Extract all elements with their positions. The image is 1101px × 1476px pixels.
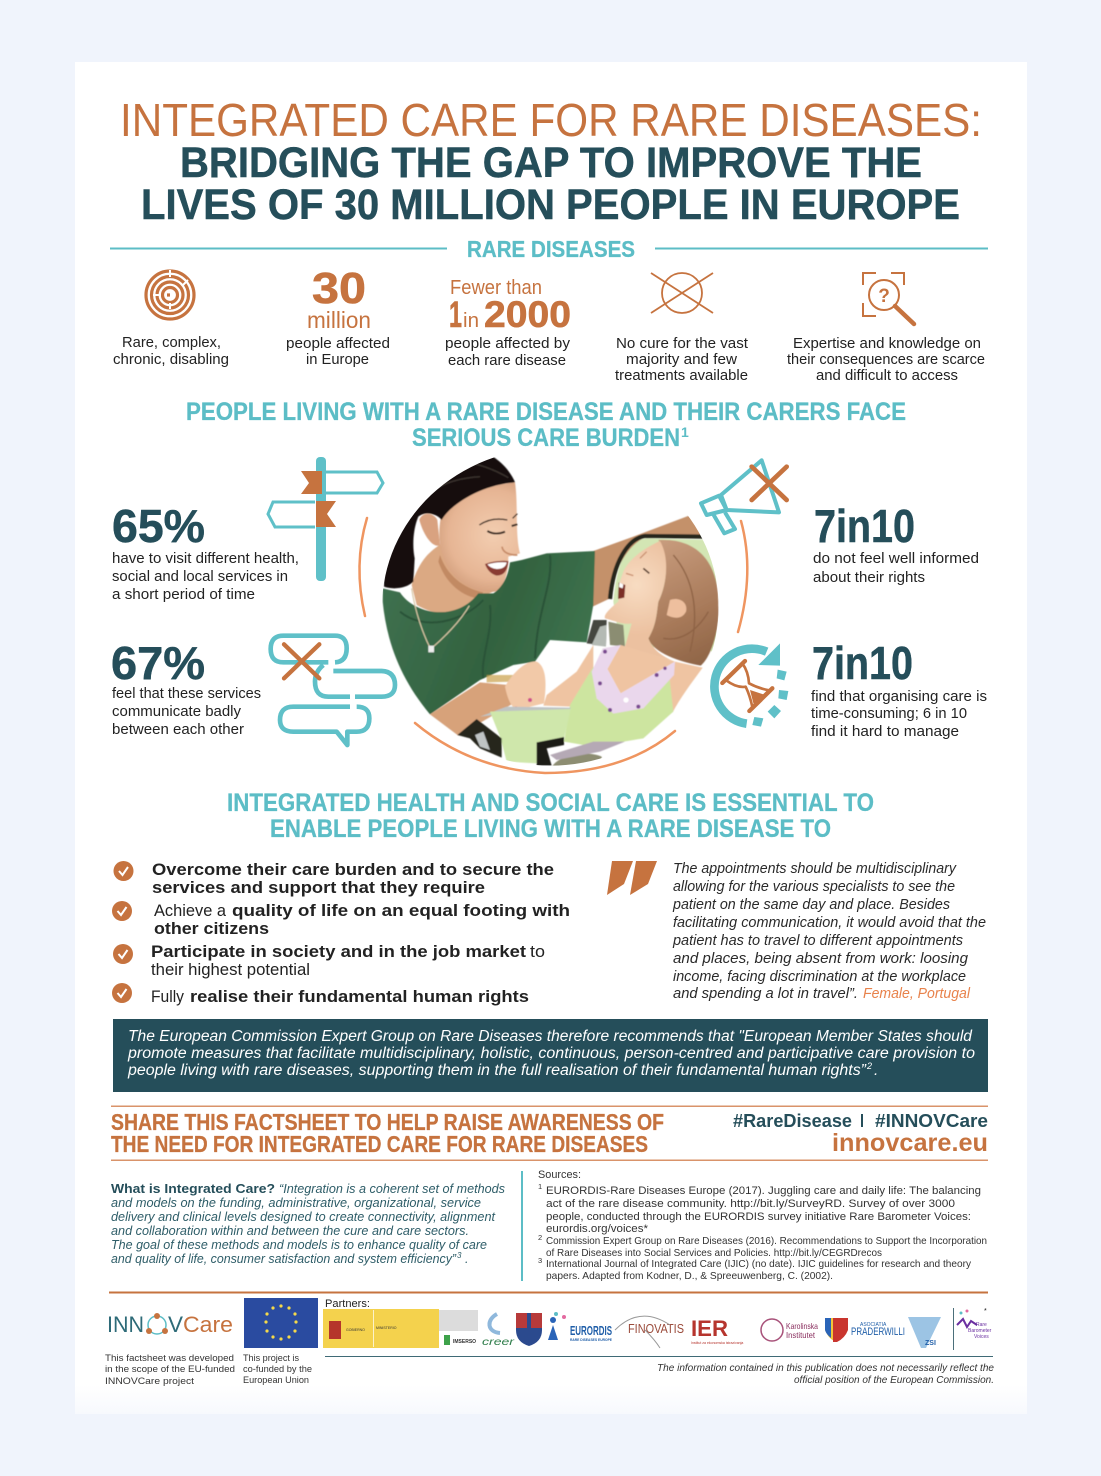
list: goals: realise their fundamental human rights [190,988,529,1006]
text: expertise: their consequences are scarce [787,351,985,368]
panel: recommendation: 2 [866,1061,872,1071]
quote: patient on the same day and place. Besides [672,897,950,913]
icon: labyrinth [146,270,194,319]
logo: ZSI [908,1317,941,1348]
text: sources: 3 [538,1256,542,1265]
stat: fewer than 1 in 2000: 2000 [484,294,571,335]
stat: 65%: social and local services in [112,568,288,585]
arc: orange ring segments [359,518,747,773]
logo: EURORDIS: EURORDIS [570,1323,612,1338]
logo: Spanish government: MINISTERIO [376,1326,397,1330]
text: what is integrated care: “Integration is a coherent set of methods [279,1182,505,1196]
title [120,94,982,229]
logo: Karolinska Institutet: Institutet [786,1330,816,1340]
stat: 7 in 10 time-consuming [811,637,987,740]
stat: fewer than 1 in 2000 [445,277,571,369]
logo: EURORDIS [548,1312,612,1342]
logo: Prader Willi: ASOCIATIA [860,1322,887,1328]
icon: speech bubbles crossed [271,636,395,745]
quote: income, facing discrimination at the workplace [673,969,966,985]
icon: check 2 [112,901,132,921]
logo: Rare Barometer Voices [953,1308,992,1350]
stat: fewer than 1 in 2000: people affected by [445,335,571,352]
call to action: share: SHARE THIS FACTSHEET TO HELP RAISE AWARENESS OF [111,1109,664,1135]
stat: 67% [111,637,261,738]
call to action: share: #INNOVCare [875,1111,988,1131]
icon: megaphone crossed [701,460,787,533]
text: disclaimer: official position of the European Commission. [794,1375,994,1386]
text: no cure [615,335,749,384]
quote: facilitating communication, it would avoid that the [673,915,986,931]
text: what is integrated care: delivery and clinical levels designed to create connectivity, alignment [111,1210,496,1224]
panel: recommendation [113,1019,988,1092]
heading: integrated care essential: INTEGRATED HEALTH AND SOCIAL CARE IS ESSENTIAL TO [227,789,874,817]
quote: patient has to travel to different appointments [672,933,963,949]
text: sources: EURORDIS-Rare Diseases Europe (2017). Juggling care and daily life: The balancing [546,1185,981,1197]
text: what is integrated care: The goal of these methods and models is to enhance quality of care [111,1238,487,1252]
text: expertise [787,335,985,384]
logo: FINOVATIS: FINOVATIS [628,1321,684,1336]
text: rare, complex [113,334,229,368]
heading: care burden [186,398,906,452]
list: goals: their highest potential [151,961,310,979]
divider [325,1356,993,1357]
logo: Prader Willi: PRADERWILLI [851,1326,905,1338]
logo: Rare Barometer Voices: Rare [976,1322,987,1328]
call to action: share: THE NEED FOR INTEGRATED CARE FOR RARE DISEASES [111,1131,648,1157]
stat: 7 in 10 time-consuming: find that organising care is [811,688,987,705]
icon: check 1 [114,861,134,881]
text: sources: papers. Adapted from Kodner, D., & Spreeuwenberg, C. (2002). [546,1270,833,1282]
woman shirt [383,551,595,714]
title: BRIDGING THE GAP TO IMPROVE THE [180,139,922,187]
list: goals: Participate in society and in the job market [151,943,527,961]
text: sources: eurordis.org/voices* [546,1223,649,1235]
logo: Rare Barometer Voices: Barometer [968,1328,992,1334]
list: goals: to [530,943,545,961]
panel: recommendation: people living with rare diseases, supporting them in the full realisation of their fundamental human rights” [127,1062,867,1079]
logo: IMSERSO: IMSERSO [453,1339,476,1345]
stat: 65%: have to visit different health, [112,550,299,567]
child hand [505,662,546,710]
stat: 7 in 10 time-consuming: 7in10 [812,637,913,689]
title: LIVES OF 30 MILLION PEOPLE IN EUROPE [141,181,960,229]
logo: INNOVCare [107,1312,233,1337]
logo: FINOVATIS [615,1316,684,1348]
logo: CREER: creer [482,1337,515,1348]
stat: 65% [112,500,299,603]
title: INTEGRATED CARE FOR RARE DISEASES: [120,94,982,146]
text: sources: 2 [538,1233,542,1242]
stat: 65%: a short period of time [112,586,255,603]
stat: 7 in 10 time-consuming: time-consuming; 6 in 10 [811,705,967,722]
stat: 67%: feel that these services [112,685,261,702]
child face [605,541,675,662]
woman arm [593,513,708,607]
icon: crossed circle [651,273,713,313]
stat: 30 million: million [307,307,371,333]
logo: IER: IER [691,1316,728,1341]
wheelchair [480,707,571,717]
text: sources: Commission Expert Group on Rare Diseases (2016). Recommendations to Support the Incorporation [546,1235,987,1247]
list: goals: quality of life on an equal footing with [232,902,570,920]
text: what is integrated care: What is Integrated Care? [111,1181,275,1196]
panel: white card [75,62,1027,1414]
list: goals: Fully [151,988,185,1006]
call to action: share [111,1106,988,1161]
logo: IER: Institut za ekonomska istrazivanja [691,1341,743,1345]
text: what is integrated care [111,1181,505,1266]
woman ear [419,514,440,546]
logo: IMSERSO [439,1310,478,1345]
heading: integrated care essential: ENABLE PEOPLE LIVING WITH A RARE DISEASE TO [270,815,831,843]
call to action: share: innovcare.eu [832,1129,988,1157]
quote [672,861,986,1002]
headrest background [613,538,717,652]
icon: check 3 [113,944,133,964]
text: no cure: majority and few [626,351,737,368]
heading: care burden: PEOPLE LIVING WITH A RARE DISEASE AND THEIR CARERS FACE [186,398,906,426]
photo: carer and child [383,449,719,768]
stat: 7 in 10 informed: about their rights [813,569,925,586]
text: sources [521,1169,987,1282]
logo: INNOVCare: Care [183,1312,233,1337]
logo: Karolinska Institutet: Karolinska [786,1321,818,1331]
text: factsheet note: INNOVCare project [105,1376,194,1387]
stat: 30 million: people affected [286,335,390,352]
heading: integrated care essential [227,789,874,843]
logos: partners [323,1308,992,1350]
text: sources: 1 [538,1182,542,1191]
stat: fewer than 1 in 2000: Fewer than [450,277,542,299]
child hair [648,540,719,666]
icon: signpost [268,457,383,581]
stat: 67%: between each other [112,721,244,738]
text: factsheet note: in the scope of the EU-funded [105,1364,235,1375]
text: what is integrated care: and collaboration within and between the cure and care sectors. [111,1224,469,1238]
quote: The appointments should be multidisciplinary [673,861,957,877]
logo: Rare Barometer Voices: * [984,1308,987,1315]
logo: crest [516,1313,542,1346]
text: sources: act of the rare disease community. http://bit.ly/SurveyRD. Survey of over 3000 [546,1198,955,1210]
woman neck [412,543,493,614]
icon: hourglass timer [714,643,788,727]
quote: and spending a lot in travel”. [673,986,858,1002]
text: co-funding note: This project is [243,1353,299,1364]
text: sources: people, conducted through the EURORDIS survey initiative Rare Barometer Voices: [546,1211,971,1223]
divider [109,1292,988,1294]
icon: magnifier with question mark: ? [878,286,890,307]
text: no cure: treatments available [615,367,748,384]
text: what is integrated care: . [465,1252,468,1266]
list: goals [112,861,570,1006]
text: what is integrated care: and models on the funding, administrative, organizational, service [111,1196,481,1210]
logo: Prader Willi [825,1318,905,1342]
list: goals: Achieve a [154,902,227,920]
text: co-funding note [243,1353,312,1386]
logo: Rare Barometer Voices: Voices [974,1334,989,1340]
panel: recommendation: The European Commission Expert Group on Rare Diseases therefore recommends that "European Member States should [128,1028,973,1045]
woman features [479,514,517,525]
icon: check 4 [112,983,132,1003]
woman face [439,482,520,592]
logo: Spanish government: GOBIERNO [346,1328,365,1332]
text: sources: International Journal of Integrated Care (IJIC) (no date). IJIC guidelines for research and theory [546,1258,972,1270]
panel: recommendation: promote measures that facilitate multidisciplinary, holistic, continuous, person-centred and participative care provision to [127,1045,975,1062]
stat: 30 million: in Europe [306,351,369,368]
logo: IER [691,1316,743,1345]
woman hair [384,449,515,588]
logo: CREER [482,1314,515,1348]
logo: EU flag [244,1298,318,1348]
stat: 7 in 10 informed: do not feel well informed [813,550,979,567]
logo: Spanish government [323,1309,439,1348]
text: no cure: No cure for the vast [616,335,749,352]
text: expertise: Expertise and knowledge on [793,335,981,352]
heading: care burden: 1 [681,424,689,440]
child dress [564,667,673,747]
text: co-funding note: European Union [243,1375,309,1386]
heading: care burden: SERIOUS CARE BURDEN [412,424,680,452]
icon: quotation marks [607,861,657,895]
child chest and arms [607,645,675,693]
stat: 67%: communicate badly [112,703,241,720]
text: expertise: and difficult to access [816,367,958,384]
stat: 67%: 67% [111,637,205,689]
logo: Karolinska Institutet [761,1319,818,1341]
quote: Female, Portugal [863,986,971,1002]
stat: 7 in 10 informed: 7in10 [814,500,915,552]
list: goals: other citizens [154,920,269,938]
woman forearm [430,682,513,736]
text: partners: Partners: [325,1298,370,1310]
heading: rare diseases: RARE DISEASES [467,236,635,262]
text: disclaimer [657,1363,994,1386]
stat: 30 million: 30 [312,264,366,313]
text: what is integrated care: 3 [457,1251,462,1260]
text: sources: of Rare Diseases into Social Services and Policies. http://bit.ly/CEGRDrecos [546,1247,882,1259]
icon: magnifier with question mark [863,273,914,324]
list: goals: Overcome their care burden and to secure the [152,861,554,879]
text: rare, complex: chronic, disabling [113,351,229,368]
text: sources: Sources: [538,1169,581,1181]
text: factsheet note: This factsheet was developed [105,1353,234,1364]
text: disclaimer: The information contained in this publication does not necessarily reflect the [657,1363,994,1374]
text: rare, complex: Rare, complex, [122,334,221,351]
call to action: share: #RareDisease [733,1111,852,1131]
text: factsheet note [105,1353,235,1387]
stat: 30 million [286,264,390,368]
stat: 65%: 65% [112,500,205,552]
stat: 7 in 10 time-consuming: find it hard to manage [811,723,959,740]
quote: allowing for the various specialists to see the [673,879,955,895]
quote: and places, being absent from work: loosing [673,951,968,967]
logo: INNOVCare: INN [107,1312,144,1337]
panel: recommendation: . [874,1062,878,1079]
logo: ZSI: ZSI [925,1340,936,1347]
logo: EURORDIS: RARE DISEASES EUROPE [570,1337,612,1342]
stat: fewer than 1 in 2000: each rare disease [448,352,566,369]
text: what is integrated care: and quality of life, consumer satisfaction and system efficiency” [111,1252,457,1266]
stat: fewer than 1 in 2000: 1 [449,294,462,335]
text: co-funding note: co-funded by the [243,1364,312,1375]
stat: fewer than 1 in 2000: in [463,310,479,332]
list: goals: services and support that they require [152,879,485,897]
stat: 7 in 10 informed [813,500,979,586]
logo: INNOVCare: V [168,1312,183,1337]
